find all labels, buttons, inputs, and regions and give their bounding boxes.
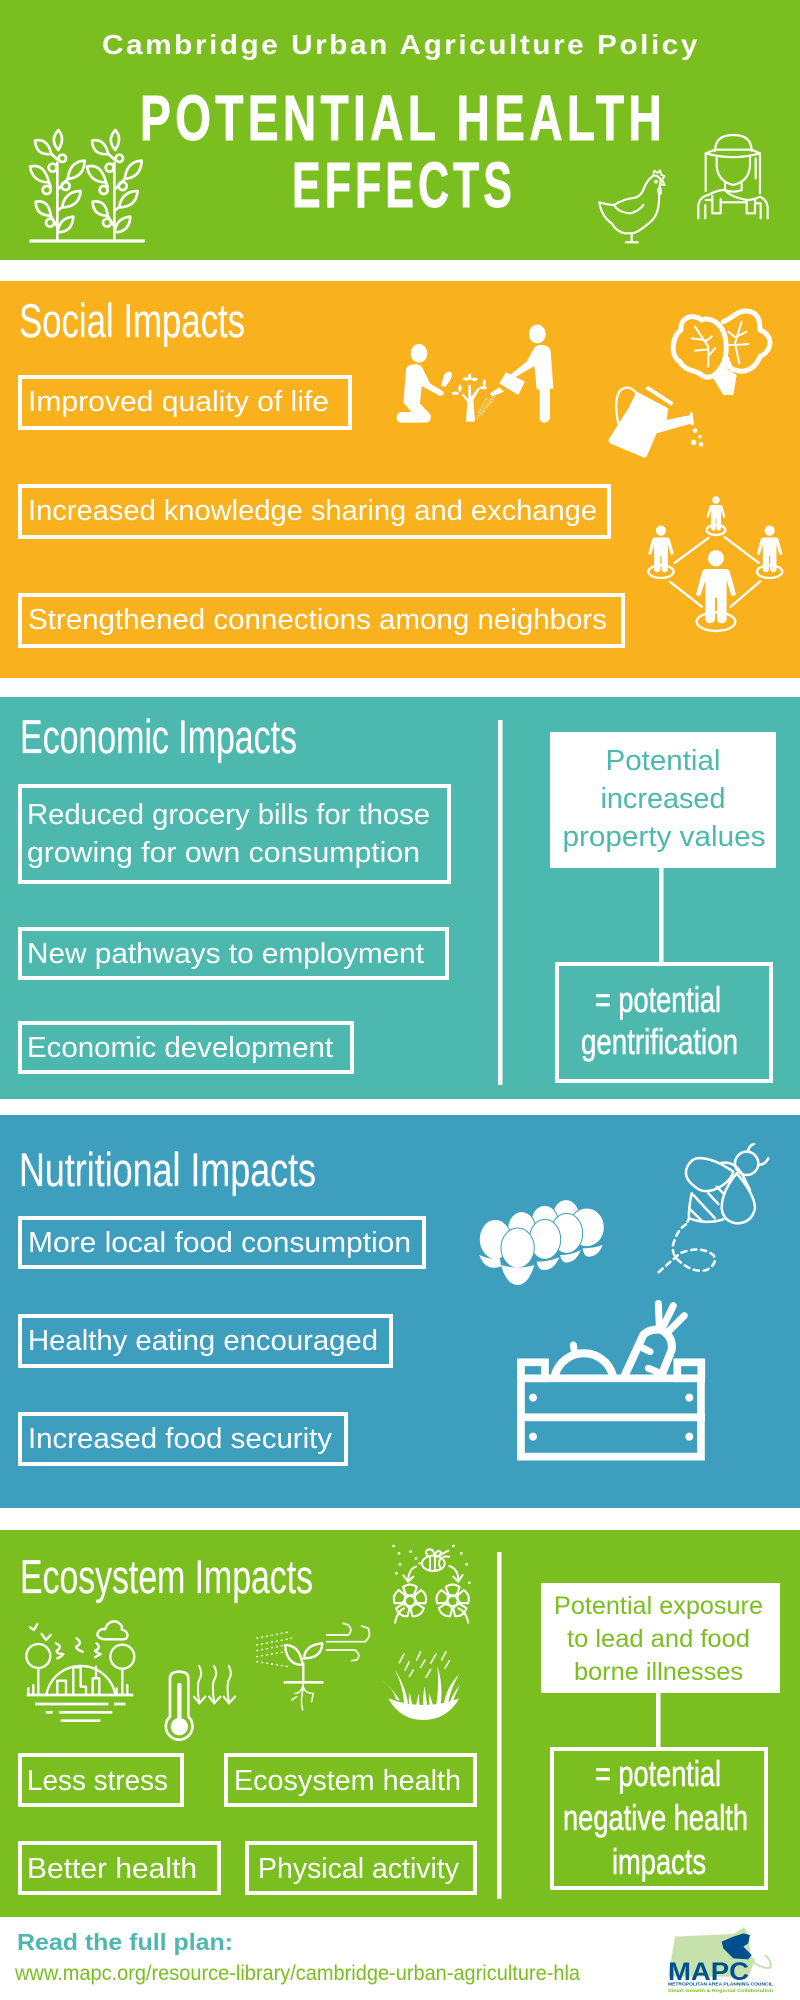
box: healthy eating bbox=[20, 1316, 391, 1366]
icon: grass and rain bbox=[381, 1652, 460, 1720]
box: pathways to employment: New pathways to employment bbox=[27, 938, 424, 970]
heading: nutritional impacts: Nutritional Impacts bbox=[19, 1143, 316, 1196]
box: food security bbox=[20, 1414, 346, 1464]
box: connections among neighbors: Strengthened connections among neighbors bbox=[28, 604, 607, 636]
icon: bee with dashed trail bbox=[657, 1144, 768, 1273]
icon: people network bbox=[648, 496, 782, 631]
box: local food bbox=[20, 1218, 424, 1267]
logo: MAPC: MAPC bbox=[668, 1958, 749, 1986]
box: connections among neighbors bbox=[20, 595, 623, 646]
title bbox=[140, 82, 666, 221]
box: ecosystem health bbox=[226, 1755, 475, 1805]
callout: negative health impacts: = potential bbox=[595, 1753, 721, 1794]
logo: MAPC bbox=[668, 1927, 773, 1993]
box: less stress: Less stress bbox=[27, 1765, 168, 1797]
footer: read the full plan: www.mapc.org/resource-library/cambridge-urban-agriculture-hla bbox=[14, 1962, 580, 1985]
box: physical activity: Physical activity bbox=[258, 1853, 460, 1885]
box: physical activity bbox=[247, 1843, 475, 1893]
icon: vegetable crate bbox=[521, 1303, 701, 1457]
box: knowledge sharing: Increased knowledge sharing and exchange bbox=[28, 495, 597, 527]
callout: negative health impacts: negative health bbox=[563, 1797, 748, 1838]
box: improved quality of life bbox=[20, 377, 350, 428]
box: economic development bbox=[20, 1023, 352, 1072]
heading: ecosystem impacts: Ecosystem Impacts bbox=[20, 1550, 313, 1603]
icon: chicken bbox=[599, 170, 665, 242]
callout: lead exposure: Potential exposure bbox=[554, 1592, 763, 1620]
panel: social impacts bbox=[0, 281, 800, 678]
icon: watering can bbox=[608, 386, 703, 457]
icon: plants bbox=[30, 130, 143, 241]
panel: nutritional impacts bbox=[0, 1115, 800, 1508]
callout: property values: Potential bbox=[606, 745, 720, 777]
icon: eggs bbox=[479, 1200, 604, 1285]
callout: negative health impacts: impacts bbox=[612, 1841, 706, 1882]
icon: green city dome bbox=[26, 1621, 134, 1721]
subtitle: Cambridge Urban Agriculture Policy bbox=[102, 29, 700, 60]
heading: social impacts: Social Impacts bbox=[19, 294, 245, 347]
icon: gardeners bbox=[397, 325, 553, 423]
box: healthy eating: Healthy eating encouraged bbox=[28, 1325, 378, 1357]
box: better health bbox=[20, 1843, 219, 1893]
panel: ecosystem impacts bbox=[0, 1530, 800, 1917]
icon: beekeeper bbox=[698, 135, 768, 218]
callout: negative health impacts bbox=[552, 1749, 766, 1888]
callout: lead exposure: to lead and food bbox=[567, 1625, 750, 1653]
callout: gentrification: gentrification bbox=[581, 1021, 738, 1062]
logo: MAPC: METROPOLITAN AREA PLANNING COUNCIL bbox=[668, 1982, 773, 1986]
divider bbox=[497, 1552, 502, 1899]
logo: MAPC: Smart Growth & Regional Collaboration bbox=[668, 1988, 773, 1993]
box: food security: Increased food security bbox=[28, 1423, 333, 1455]
box: reduced grocery bills bbox=[20, 786, 449, 882]
panel: header bbox=[0, 0, 800, 260]
panel: economic impacts bbox=[0, 697, 800, 1099]
heading: economic impacts: Economic Impacts bbox=[20, 710, 297, 763]
connector bbox=[656, 1693, 660, 1747]
footer: read the full plan: Read the full plan: bbox=[17, 1929, 233, 1955]
box: improved quality of life: Improved quality of life bbox=[28, 386, 329, 418]
box: reduced grocery bills: Reduced grocery bills for those bbox=[27, 799, 430, 831]
callout: property values: property values bbox=[562, 821, 766, 853]
box: local food: More local food consumption bbox=[28, 1227, 411, 1259]
box: pathways to employment bbox=[20, 929, 447, 978]
callout: gentrification bbox=[557, 964, 771, 1081]
callout: lead exposure bbox=[541, 1583, 780, 1693]
callout: gentrification: = potential bbox=[595, 979, 721, 1020]
icon: pollination bbox=[392, 1545, 471, 1623]
footer: read the full plan bbox=[14, 1929, 580, 1985]
icon: thermometer with arrows bbox=[166, 1666, 235, 1740]
box: ecosystem health: Ecosystem health bbox=[234, 1765, 461, 1797]
divider bbox=[498, 720, 502, 1085]
callout: property values bbox=[550, 732, 776, 868]
box: knowledge sharing bbox=[20, 486, 609, 537]
icon: broccoli bbox=[673, 311, 770, 395]
icon: seedling with wind and mist bbox=[257, 1623, 369, 1710]
callout: lead exposure: borne illnesses bbox=[574, 1658, 743, 1686]
connector bbox=[659, 868, 664, 962]
callout: property values: increased bbox=[600, 783, 726, 815]
box: better health: Better health bbox=[27, 1853, 197, 1885]
box: less stress bbox=[20, 1755, 182, 1805]
box: reduced grocery bills: growing for own consumption bbox=[27, 837, 420, 869]
box: economic development: Economic development bbox=[27, 1032, 333, 1064]
title: EFFECTS bbox=[292, 149, 516, 221]
